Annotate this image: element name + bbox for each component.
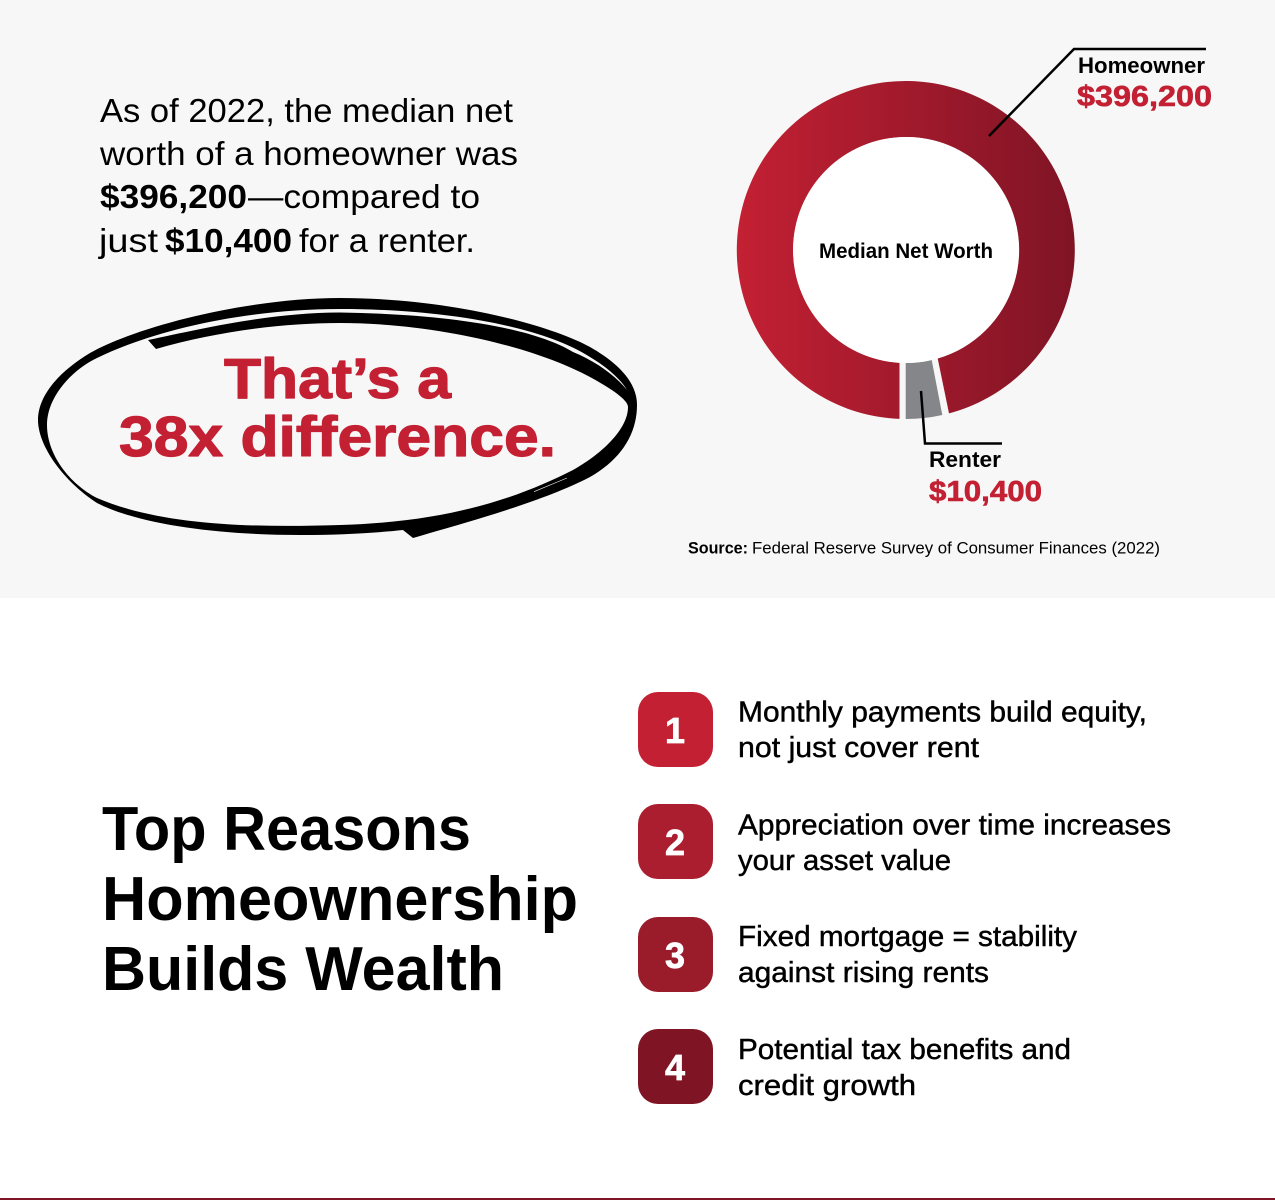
reason 3 xyxy=(638,917,1078,992)
reason 2 text xyxy=(738,810,1171,877)
heading: top reasons: Homeownership xyxy=(102,865,578,934)
reason 1 xyxy=(638,692,1147,767)
scribble ellipse xyxy=(38,298,637,538)
footer rule xyxy=(0,1198,1275,1200)
source note: Source: xyxy=(688,538,748,558)
label: renter: Renter xyxy=(929,447,1001,472)
label: homeowner: Homeowner xyxy=(1078,53,1205,78)
heading: top reasons xyxy=(102,795,578,1004)
intro paragraph: for a renter. xyxy=(299,222,475,259)
reason 3 text: against rising rents xyxy=(738,957,989,989)
label: renter xyxy=(929,447,1042,508)
intro paragraph: As of 2022, the median net xyxy=(100,92,513,129)
badge 3 xyxy=(638,917,713,992)
number 2: 2 xyxy=(665,822,685,863)
reason 3 text: Fixed mortgage = stability xyxy=(738,921,1078,953)
badge 2 xyxy=(638,804,713,879)
intro paragraph: $396,200 xyxy=(100,178,247,215)
reason 1 text: Monthly payments build equity, xyxy=(738,696,1147,728)
label: homeowner: $396,200 xyxy=(1077,81,1212,113)
callout text xyxy=(119,347,556,469)
reason 4 text: Potential tax benefits and xyxy=(738,1034,1071,1066)
label: homeowner xyxy=(1077,53,1212,113)
heading: top reasons: Top Reasons xyxy=(102,795,471,864)
reason 1 text: not just cover rent xyxy=(738,732,979,764)
reason 2 xyxy=(638,804,1171,879)
centre label: Median Net Worth xyxy=(819,240,993,263)
intro paragraph: —compared to xyxy=(248,178,480,215)
badge 1 xyxy=(638,692,713,767)
panel: top comparison background xyxy=(0,0,1275,598)
intro paragraph: worth of a homeowner was xyxy=(99,135,518,172)
reason 4 text xyxy=(738,1034,1071,1102)
number 1: 1 xyxy=(665,710,685,751)
callout text: That’s a xyxy=(224,347,452,411)
number 3: 3 xyxy=(665,935,685,976)
intro paragraph xyxy=(98,92,518,259)
reason 4 text: credit growth xyxy=(738,1070,916,1102)
badge 4 xyxy=(638,1029,713,1104)
homeowner segment xyxy=(737,81,1075,419)
donut chart: median net worth xyxy=(737,81,1075,419)
callout: hand-drawn ellipse with 38x difference xyxy=(38,298,637,538)
reason 1 text xyxy=(738,696,1147,764)
heading: top reasons: Builds Wealth xyxy=(102,935,504,1004)
reason 2 text: Appreciation over time increases xyxy=(738,810,1171,842)
reason 4 xyxy=(638,1029,1071,1104)
donut centre xyxy=(793,137,1019,363)
number 4: 4 xyxy=(665,1047,685,1088)
label: renter: $10,400 xyxy=(929,476,1042,508)
leader line: homeowner xyxy=(989,49,1206,136)
reason 3 text xyxy=(738,921,1078,989)
intro paragraph: just xyxy=(98,222,158,259)
intro paragraph: $10,400 xyxy=(165,222,292,259)
source note: Federal Reserve Survey of Consumer Finances (2022) xyxy=(752,538,1160,558)
callout text: 38x difference. xyxy=(119,405,556,469)
reason 2 text: your asset value xyxy=(738,845,951,877)
renter segment xyxy=(906,360,942,419)
leader line: renter xyxy=(921,391,1002,444)
